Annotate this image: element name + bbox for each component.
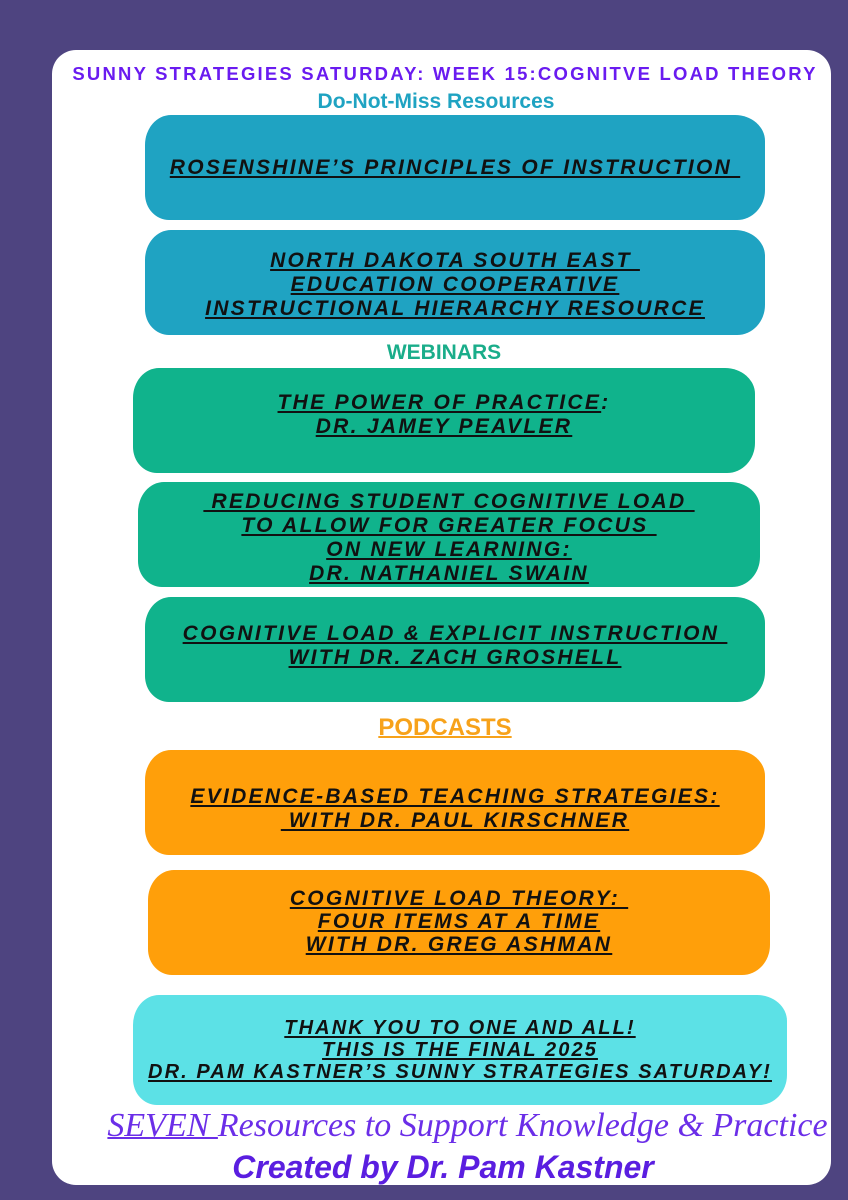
- podcast box 1: WITH DR. PAUL KIRSCHNER: [289, 809, 629, 832]
- webinar box 3: WITH DR. ZACH GROSHELL: [289, 646, 621, 669]
- closing message box: THANK YOU TO ONE AND ALL!: [284, 1017, 636, 1039]
- webinar box 1: THE POWER OF PRACTICE:: [278, 391, 610, 414]
- podcast box 1: [145, 750, 765, 855]
- webinar box 1: [133, 368, 755, 473]
- resource box 1: ROSENSHINE’S PRINCIPLES OF INSTRUCTION: [170, 156, 732, 179]
- podcast box 2: COGNITIVE LOAD THEORY:: [290, 887, 620, 910]
- subtitle: Do-Not-Miss Resources: Do-Not-Miss Resources: [318, 90, 554, 113]
- resource box 1: [145, 115, 765, 220]
- podcast box 1: EVIDENCE-BASED TEACHING STRATEGIES:: [190, 785, 720, 808]
- webinar box 2: [138, 482, 760, 587]
- webinar box 2: TO ALLOW FOR GREATER FOCUS: [241, 514, 648, 537]
- closing message box: [133, 995, 787, 1105]
- heading: webinars: WEBINARS: [387, 341, 501, 364]
- heading: podcasts: PODCASTS: [378, 714, 512, 741]
- podcast box 2: WITH DR. GREG ASHMAN: [306, 933, 612, 956]
- webinar box 3: COGNITIVE LOAD & EXPLICIT INSTRUCTION: [183, 622, 719, 645]
- closing message box: DR. PAM KASTNER’S SUNNY STRATEGIES SATURDAY!: [148, 1061, 772, 1083]
- podcast box 2: [148, 870, 770, 975]
- resource box 2: INSTRUCTIONAL HIERARCHY RESOURCE: [205, 297, 705, 320]
- resource box 2: NORTH DAKOTA SOUTH EAST: [270, 249, 632, 272]
- resource box 2: [145, 230, 765, 335]
- webinar box 1: DR. JAMEY PEAVLER: [316, 415, 572, 438]
- closing message box: THIS IS THE FINAL 2025: [322, 1039, 598, 1061]
- webinar box 2: ON NEW LEARNING:: [326, 538, 572, 561]
- webinar box 3: [145, 597, 765, 702]
- webinar box 2: REDUCING STUDENT COGNITIVE LOAD: [212, 490, 686, 513]
- webinar box 2: DR. NATHANIEL SWAIN: [309, 562, 589, 585]
- credit: Created by Dr. Pam Kastner: [232, 1149, 654, 1185]
- resource box 2: EDUCATION COOPERATIVE: [291, 273, 619, 296]
- tagline: seven resources: SEVEN Resources to Support Knowledge & Practice: [107, 1107, 828, 1144]
- podcast box 2: FOUR ITEMS AT A TIME: [318, 910, 600, 933]
- title: SUNNY STRATEGIES SATURDAY: WEEK 15:COGNITVE LOAD THEORY: [72, 63, 818, 84]
